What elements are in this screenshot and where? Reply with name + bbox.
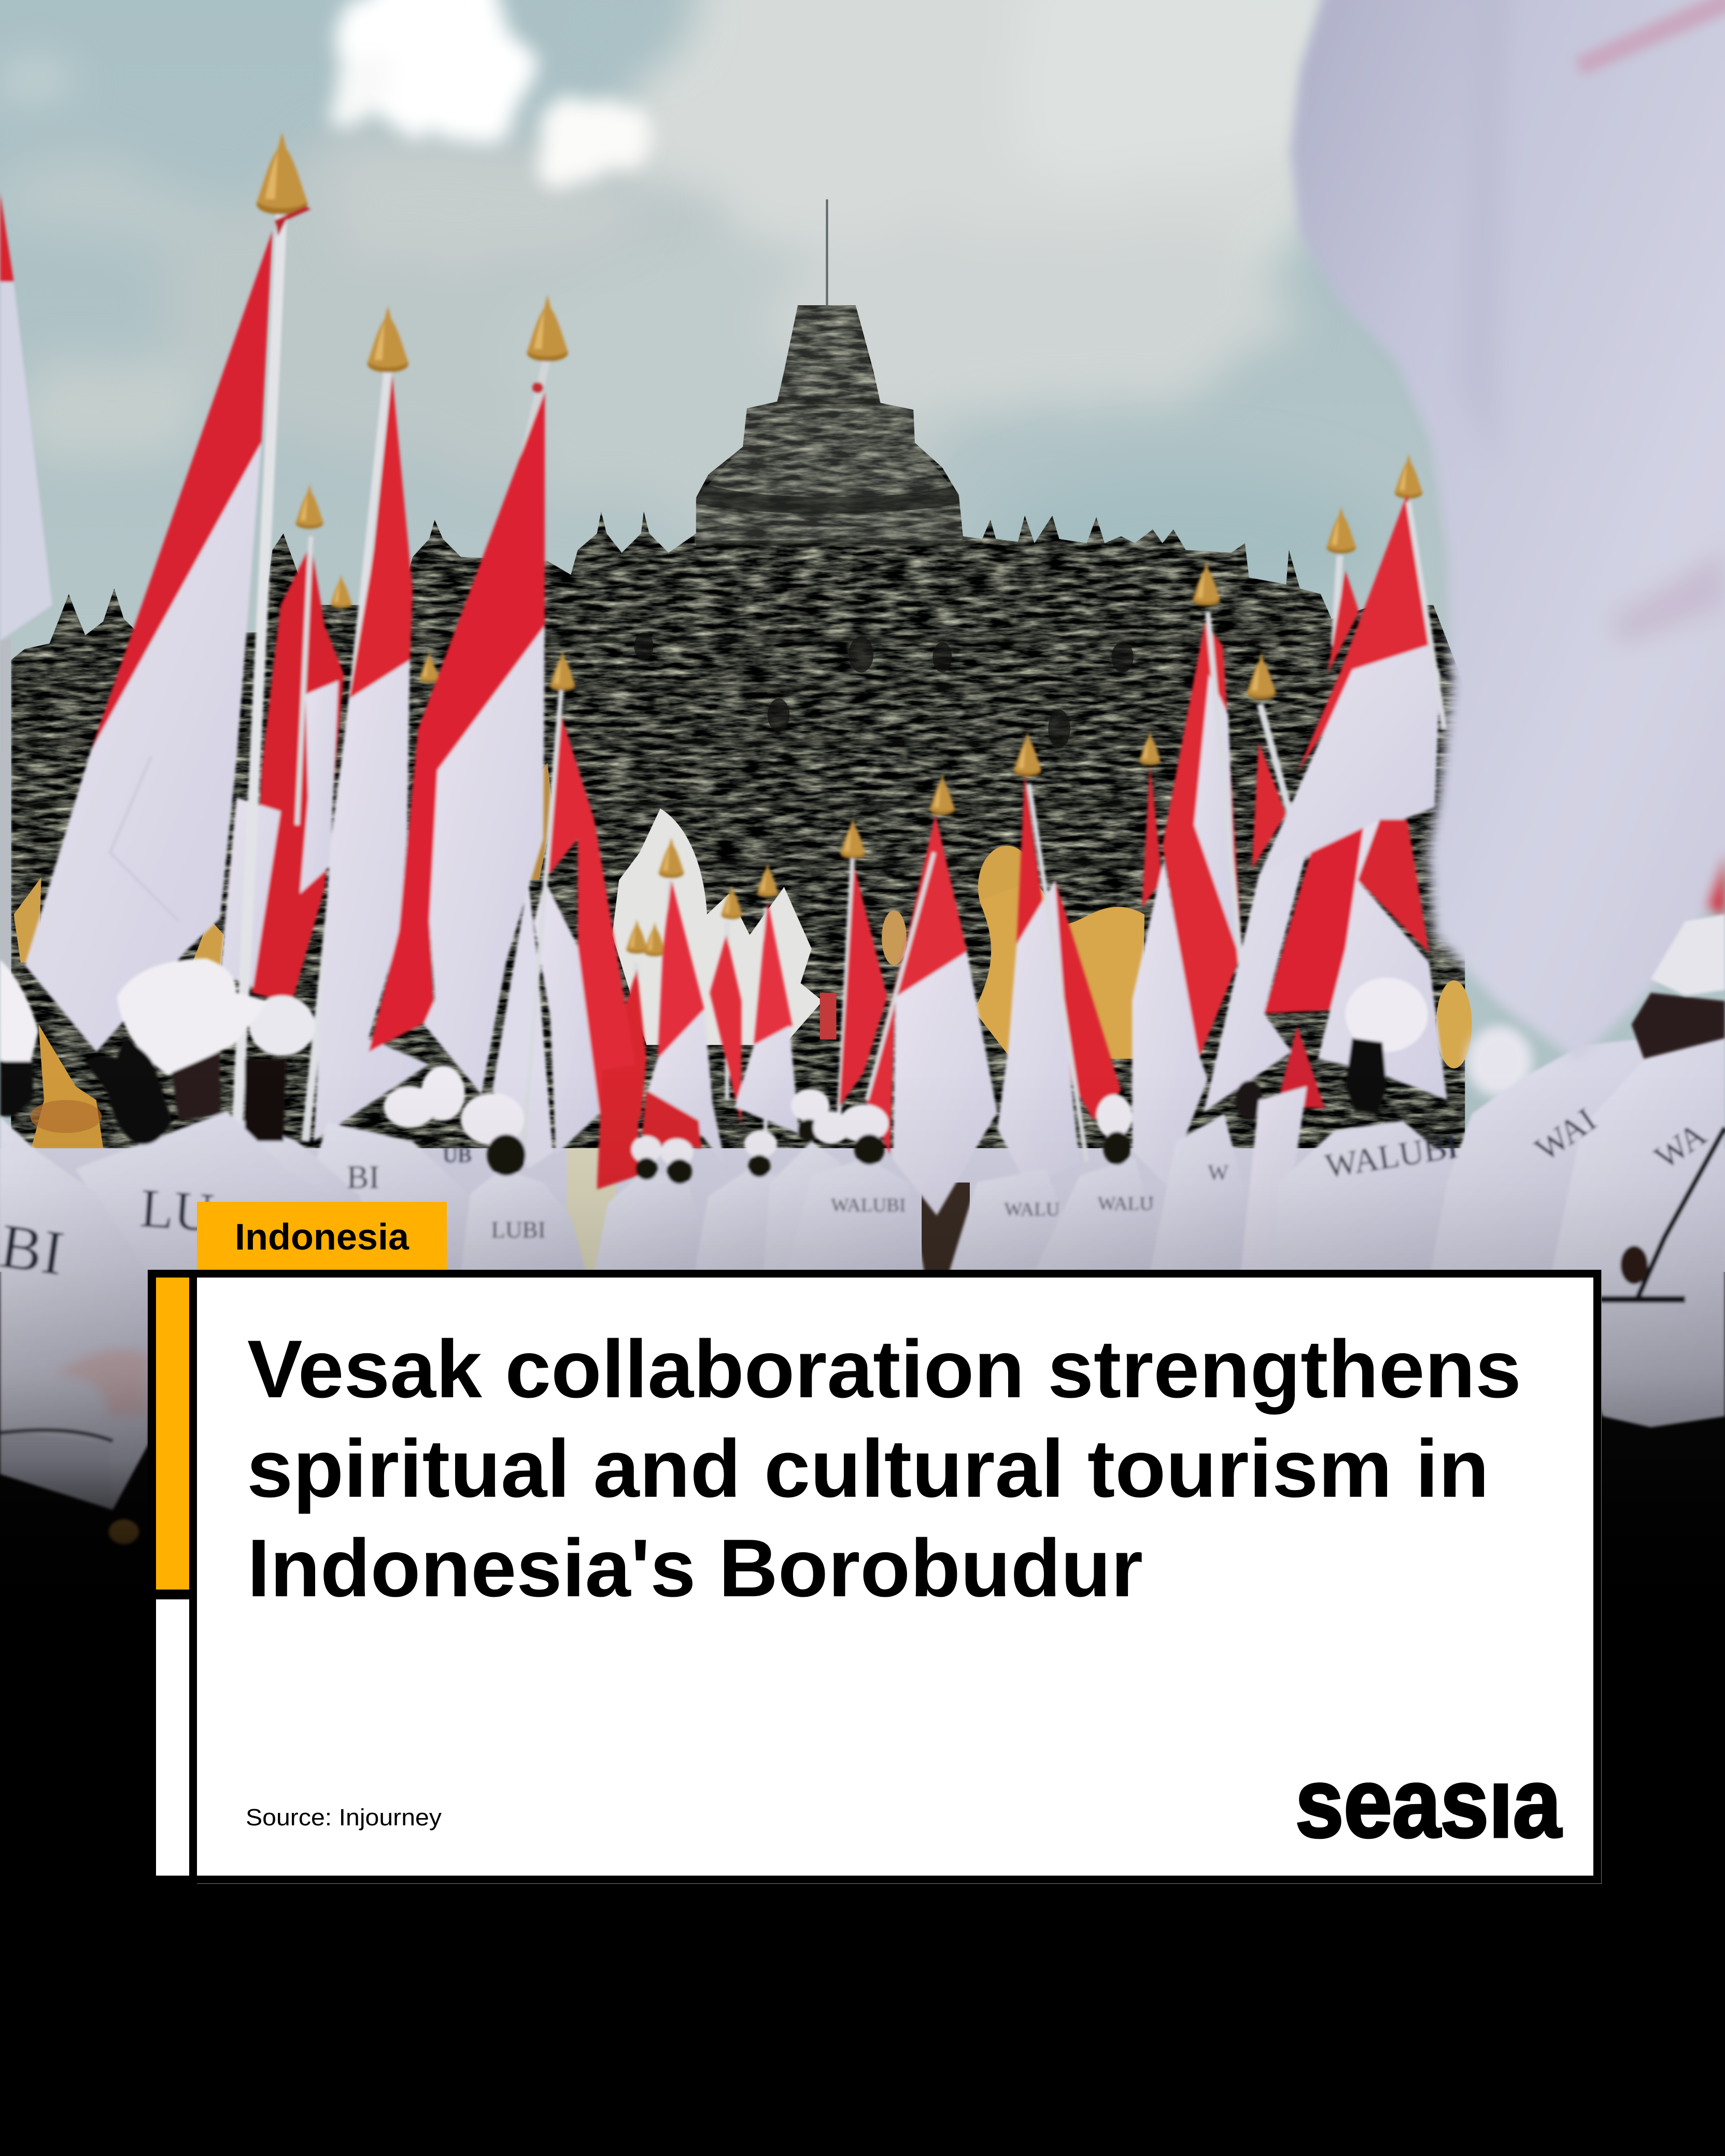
flag: L <box>865 774 997 1215</box>
flag: far centre group <box>597 863 799 1185</box>
shirt lettering: W <box>1208 1160 1228 1185</box>
flag: N <box>1132 561 1242 1185</box>
shirt lettering: WALUBI <box>831 1195 906 1216</box>
temple: Borobudur silhouette with stone texture <box>0 295 1472 1189</box>
black frame of the title card <box>148 1270 1601 1883</box>
flag: B large left <box>25 132 311 1141</box>
title: Vesak collaboration strengthens <box>247 1324 1521 1415</box>
person: back row with cap <box>314 1066 586 1272</box>
person: right cap in front of flag <box>1632 914 1725 1059</box>
side bar: amber segment <box>156 1278 189 1590</box>
people base and dark ground <box>0 1148 1725 1668</box>
flag: D <box>305 306 429 1141</box>
logo: seasia wordmark: seasıa <box>1295 1748 1562 1858</box>
flag: F <box>492 650 638 1189</box>
shirt lettering: LU <box>138 1177 216 1243</box>
shirt lettering: WALUBI <box>1323 1127 1461 1185</box>
temple spire antenna <box>826 200 828 307</box>
flag: small back flag O <box>1139 506 1359 907</box>
frame hairline <box>197 1270 1602 1884</box>
card: white main panel <box>197 1278 1593 1876</box>
flag: centre red and white <box>641 838 726 1169</box>
shirt lettering: BI <box>347 1158 379 1195</box>
shirt lettering: LUBI <box>491 1217 546 1243</box>
shirt lettering: WA <box>1648 1115 1714 1177</box>
dark gradient fade over the lower photo <box>0 1072 1725 1678</box>
person: near left with white cap and hair bun <box>76 958 399 1279</box>
category tag: Indonesia <box>235 1217 409 1258</box>
flag: right of centre K <box>837 818 887 1116</box>
photo: Borobudur ceremony <box>0 0 1725 1678</box>
side bar: white segment <box>156 1599 189 1876</box>
flag: M <box>997 732 1121 1187</box>
shirt lettering: WAI <box>1528 1101 1603 1169</box>
category tag <box>197 1202 447 1270</box>
cream wall behind procession <box>567 1148 616 1272</box>
person: far left foreground <box>0 960 151 1544</box>
flag: blurred foreground flag <box>1290 0 1725 1061</box>
title: Indonesia's Borobudur <box>247 1523 1143 1614</box>
lotus sculpture <box>612 809 823 1045</box>
shirt lettering: UB <box>443 1144 472 1167</box>
title: spiritual and cultural tourism in <box>247 1423 1489 1514</box>
flag: C back-left group <box>220 484 439 1004</box>
shirt lettering <box>0 1101 1714 1289</box>
flag: E <box>369 295 568 1095</box>
flag: P <box>1204 454 1447 1112</box>
shirt lettering: WALU <box>1004 1199 1060 1220</box>
people: small procession in background <box>594 1081 1266 1272</box>
source credit: Source: Injourney <box>246 1804 442 1831</box>
flag: A edge of frame <box>0 192 52 969</box>
golden reclining buddha <box>882 846 1472 1068</box>
sky with clouds <box>0 0 1725 1375</box>
title <box>247 1324 1521 1614</box>
person: right foreground <box>1431 1026 1725 1427</box>
small golden statues and offering tower <box>14 763 837 1152</box>
shirt lettering: WALU <box>1098 1194 1153 1215</box>
person: center right WALUBI shirt <box>1241 977 1469 1272</box>
